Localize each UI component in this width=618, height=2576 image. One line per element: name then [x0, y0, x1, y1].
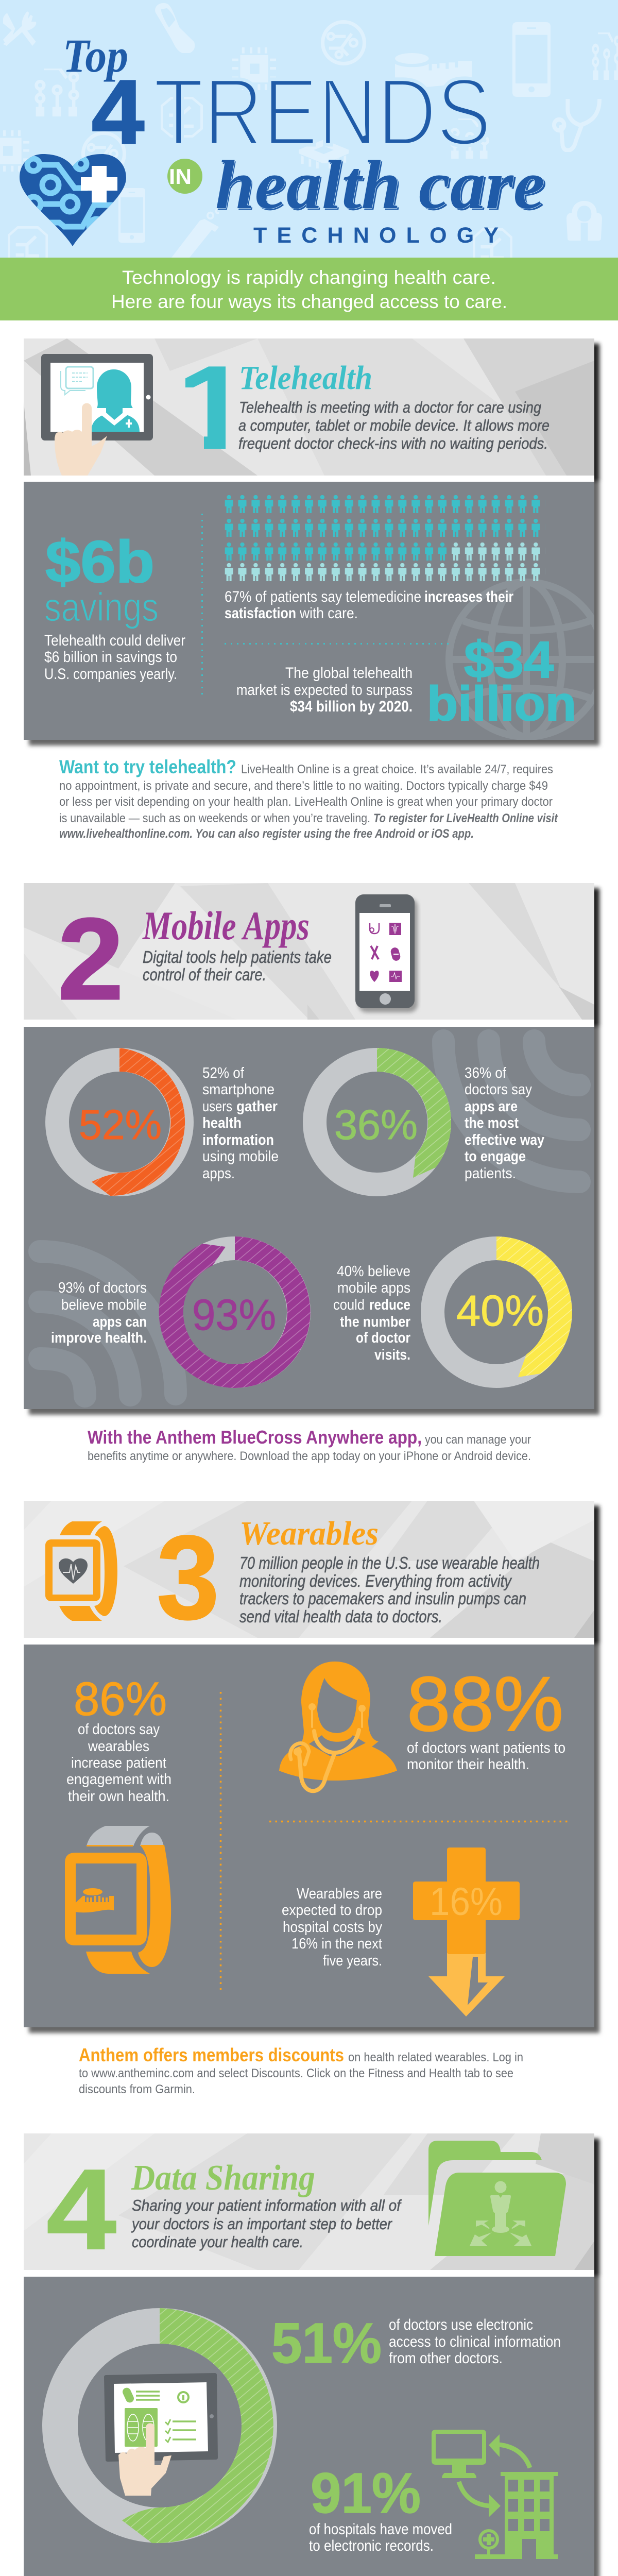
number 4: 4	[46, 2146, 116, 2274]
text: 52% of smartphone users: smartphone	[202, 1081, 274, 1098]
stat: 51%	[271, 2312, 561, 2375]
icon: globe	[449, 582, 604, 737]
panel: data sharing stats	[24, 2277, 594, 2576]
stat: 86%: 86%	[74, 1673, 167, 1725]
text: 40% believe: 40% believe	[337, 1263, 410, 1280]
stat: $34 billion: billion	[427, 676, 576, 731]
text: 40% believe: of doctor	[356, 1330, 410, 1346]
text: data sharing description: Sharing your patient information with all of	[132, 2196, 402, 2214]
stat: 86%: engagement with	[66, 1771, 171, 1788]
callout: Anthem discounts	[79, 2044, 523, 2096]
icon: cross with down arrow 16%: 16%	[430, 1880, 503, 1924]
text: 40% believe: the number	[340, 1314, 410, 1330]
text: 40% believe: reduce	[369, 1297, 410, 1313]
text: wearables description: 70 million people in the U.S. use wearable health	[239, 1553, 540, 1572]
chart: donut 52%: 52%	[79, 1101, 162, 1148]
stat: 91%	[309, 2462, 452, 2554]
heart circuit icon	[20, 154, 126, 246]
text: 36% of doctors: apps are	[465, 1098, 518, 1115]
section 2 shadow	[29, 888, 599, 1415]
text: 52% of smartphone users: health	[202, 1115, 242, 1131]
text: 52% of smartphone users: gather	[236, 1098, 278, 1115]
text: 52% of smartphone users: 52% of	[202, 1065, 245, 1081]
background icon pattern	[0, 3, 618, 268]
icon: tablet with records	[104, 2373, 218, 2496]
stat: $6b savings	[44, 529, 185, 683]
text: 36% of doctors: doctors say	[465, 1081, 532, 1098]
text: global telehealth market: market is expected to surpass	[236, 682, 413, 699]
stat: 88%: of doctors want patients to	[407, 1740, 565, 1756]
IN badge: IN	[169, 164, 192, 189]
chart: donut 52%	[57, 1048, 185, 1196]
chart: donut 36%: 36%	[334, 1101, 418, 1148]
text: 52% of smartphone users	[202, 1065, 279, 1182]
text: wearables description	[239, 1553, 540, 1626]
intro band: Here are four ways its changed access to care.	[111, 291, 507, 312]
stat: 86%: of doctors say	[78, 1721, 160, 1738]
text: digital tools: control of their care.	[143, 965, 266, 984]
text: wearables drop costs: expected to drop	[282, 1902, 382, 1919]
panel: data sharing header	[24, 2133, 594, 2277]
text: 40% believe	[333, 1263, 410, 1363]
callout: want to try telehealth: www.livehealthonline.com. You can also register using the free Android or iOS app.	[59, 827, 474, 841]
text: 36% of doctors: to engage	[465, 1148, 526, 1165]
panel: mobile apps stats	[24, 1027, 594, 1409]
stat: 86%	[66, 1673, 171, 1805]
callout: want to try telehealth: To register for LiveHealth Online visit	[373, 811, 558, 825]
text: wearables drop costs: hospital costs by	[283, 1919, 382, 1936]
text: 40% believe: could	[333, 1297, 365, 1313]
stat: 51%: access to clinical information	[389, 2333, 561, 2350]
stat: 88%: monitor their health.	[407, 1756, 529, 1773]
text: 93% of doctors	[51, 1280, 147, 1346]
header panel	[0, 0, 618, 268]
panel: wearables stats	[24, 1645, 594, 2027]
title: health care: health care	[215, 147, 545, 224]
callout: want to try telehealth	[59, 756, 558, 841]
text: 93% of doctors: improve health.	[51, 1330, 147, 1346]
chart: donut 40%: 40%	[456, 1286, 544, 1335]
intro band: Technology is rapidly changing health care.	[122, 267, 496, 288]
callout: want to try telehealth: or less per visit depending on your health plan. LiveHealth Online is great when your primary doctor	[59, 795, 553, 809]
decorative signal arcs	[40, 1041, 579, 1396]
text: 67% of patients: increases their	[424, 588, 513, 605]
section 3 shadow	[29, 1506, 599, 2033]
text: 36% of doctors: patients.	[465, 1165, 516, 1182]
stat: 91%: to electronic records.	[309, 2537, 434, 2554]
text: wearables drop costs	[282, 1886, 382, 1969]
number 2: 2	[58, 894, 124, 1024]
text: 67% of patients: with care.	[299, 605, 358, 622]
text: telehealth description: frequent doctor check-ins with no waiting periods.	[238, 434, 548, 452]
title: 4: 4	[92, 62, 144, 163]
text: wearables drop costs: 16% in the next	[291, 1936, 382, 1952]
icon: doctor	[279, 1662, 397, 1791]
callout: Anthem discounts: Anthem offers members discounts	[79, 2044, 344, 2065]
stat: 91%: of hospitals have moved	[309, 2521, 452, 2538]
chart: donut 36%	[315, 1048, 451, 1184]
text: data sharing description: your doctors is an important step to better	[131, 2215, 392, 2233]
panel: wearables header	[24, 1501, 594, 1645]
icon: phone with health apps	[355, 894, 418, 1012]
text: 52% of smartphone users: apps.	[202, 1165, 235, 1182]
chart: people pictogram 67%	[225, 495, 545, 581]
IN badge	[167, 159, 202, 194]
icon: wearable watch with tape	[65, 1826, 171, 1974]
text: telehealth description: Telehealth is meeting with a doctor for care using	[239, 398, 541, 416]
number 3: 3	[157, 1511, 219, 1645]
icon: folder with person	[428, 2141, 566, 2256]
text: digital tools	[143, 947, 332, 984]
text: 67% of patients	[225, 588, 513, 622]
text: 67% of patients: 67% of patients say telemedicine	[225, 588, 421, 605]
callout: want to try telehealth: Want to try telehealth?	[59, 756, 236, 777]
stat: $6b savings: $6 billion in savings to	[44, 649, 177, 666]
chart: donut 93%: 93%	[192, 1291, 276, 1339]
callout: Anthem discounts: discounts from Garmin.	[79, 2082, 195, 2096]
text: 36% of doctors: 36% of	[465, 1065, 507, 1081]
stat: $6b savings: Telehealth could deliver	[44, 632, 185, 649]
stat: 86%: increase patient	[71, 1755, 166, 1771]
text: 36% of doctors: the most	[465, 1115, 519, 1131]
text: 52% of smartphone users: using mobile	[202, 1148, 279, 1165]
icon: monitor and hospital exchange	[432, 2430, 558, 2559]
text: digital tools: Digital tools help patients take	[143, 947, 332, 967]
text: 52% of smartphone users: information	[202, 1132, 274, 1148]
stat: 88%: 88%	[407, 1660, 563, 1747]
callout: Anthem BlueCross Anywhere app: With the Anthem BlueCross Anywhere app,	[88, 1427, 422, 1448]
text: data sharing description: coordinate your health care.	[132, 2233, 303, 2251]
heading: Wearables: Wearables	[239, 1515, 379, 1552]
heading: Telehealth: Telehealth	[239, 359, 372, 397]
stat: 86%: wearables	[88, 1738, 149, 1755]
text: wearables description: send vital health data to doctors.	[239, 1607, 442, 1626]
callout: Anthem discounts: on health related wearables. Log in	[348, 2050, 523, 2064]
title: health care: health care	[216, 148, 547, 225]
panel: telehealth header	[24, 338, 594, 482]
text: wearables description: trackers to pacemakers and insulin pumps can	[239, 1589, 526, 1608]
text: 93% of doctors: 93% of doctors	[58, 1280, 147, 1296]
stat: 86%: their own health.	[68, 1788, 169, 1805]
stat: $6b savings: savings	[44, 584, 159, 630]
stat: 51%: 51%	[271, 2312, 382, 2375]
text: 93% of doctors: apps can	[93, 1314, 147, 1330]
text: 93% of doctors: believe mobile	[61, 1297, 147, 1313]
section 1 shadow	[29, 344, 599, 745]
stat: $34 billion: $34	[464, 631, 554, 689]
stat: 51%: from other doctors.	[389, 2350, 503, 2367]
chart: donut 40%	[433, 1236, 572, 1377]
text: wearables description: monitoring devices. Everything from activity	[239, 1571, 512, 1590]
text: global telehealth market: $34 billion by 2020.	[290, 698, 413, 715]
text: global telehealth market	[236, 665, 413, 715]
text: wearables drop costs: Wearables are	[297, 1886, 382, 1902]
stat: 91%: 91%	[311, 2462, 421, 2525]
panel: mobile apps header	[24, 883, 594, 1027]
callout: want to try telehealth: no appointment, is private and secure, and there’s little to no waiting. Doctors typically charge $49	[59, 779, 548, 793]
text: 52% of smartphone users: users	[202, 1098, 232, 1115]
text: data sharing description	[131, 2196, 402, 2251]
icon: tablet with doctor	[41, 354, 153, 476]
heading: Mobile Apps: Mobile Apps	[142, 903, 310, 948]
panel: telehealth stats	[24, 482, 604, 740]
icon: smartwatch with heart	[45, 1521, 117, 1621]
text: 40% believe: visits.	[374, 1347, 410, 1363]
heading: Data Sharing: Data Sharing	[131, 2158, 315, 2198]
icon: cross with down arrow 16%	[413, 1848, 520, 2016]
text: 36% of doctors: effective way	[465, 1132, 544, 1148]
callout: Anthem BlueCross Anywhere app	[88, 1427, 531, 1463]
callout: Anthem BlueCross Anywhere app: you can manage your	[425, 1433, 531, 1447]
title: Top: Top	[63, 29, 128, 82]
text: telehealth description: a computer, tablet or mobile device. It allows more	[238, 416, 550, 434]
text: 67% of patients: satisfaction	[225, 605, 296, 622]
text: wearables drop costs: five years.	[323, 1953, 382, 1969]
stat: $34 billion	[427, 631, 576, 731]
callout: want to try telehealth: is unavailable — such as on weekends or when you’re traveling.	[59, 811, 370, 825]
title: TRENDS: TRENDS	[153, 59, 491, 165]
chart: large donut 51%	[60, 2308, 273, 2543]
stat: $6b savings: $6b	[45, 529, 154, 595]
chart: donut 93%	[159, 1236, 311, 1388]
stat: $6b savings: U.S. companies yearly.	[44, 666, 177, 683]
section 4 shadow	[29, 2139, 599, 2576]
text: 36% of doctors	[465, 1065, 544, 1182]
number 1: 1	[172, 341, 256, 474]
callout: Anthem discounts: to www.antheminc.com and select Discounts. Click on the Fitness and Health tab to see	[79, 2066, 513, 2080]
callout: want to try telehealth: LiveHealth Online is a great choice. It’s available 24/7, requires	[241, 762, 553, 776]
text: global telehealth market: The global telehealth	[285, 665, 413, 682]
text: 40% believe: mobile apps	[337, 1280, 410, 1296]
callout: Anthem BlueCross Anywhere app: benefits anytime or anywhere. Download the app today on your iPhone or Android device.	[88, 1449, 531, 1463]
intro band	[0, 258, 618, 320]
text: telehealth description	[238, 398, 550, 452]
stat: 51%: of doctors use electronic	[389, 2316, 533, 2333]
title: technology: TECHNOLOGY	[253, 223, 499, 248]
